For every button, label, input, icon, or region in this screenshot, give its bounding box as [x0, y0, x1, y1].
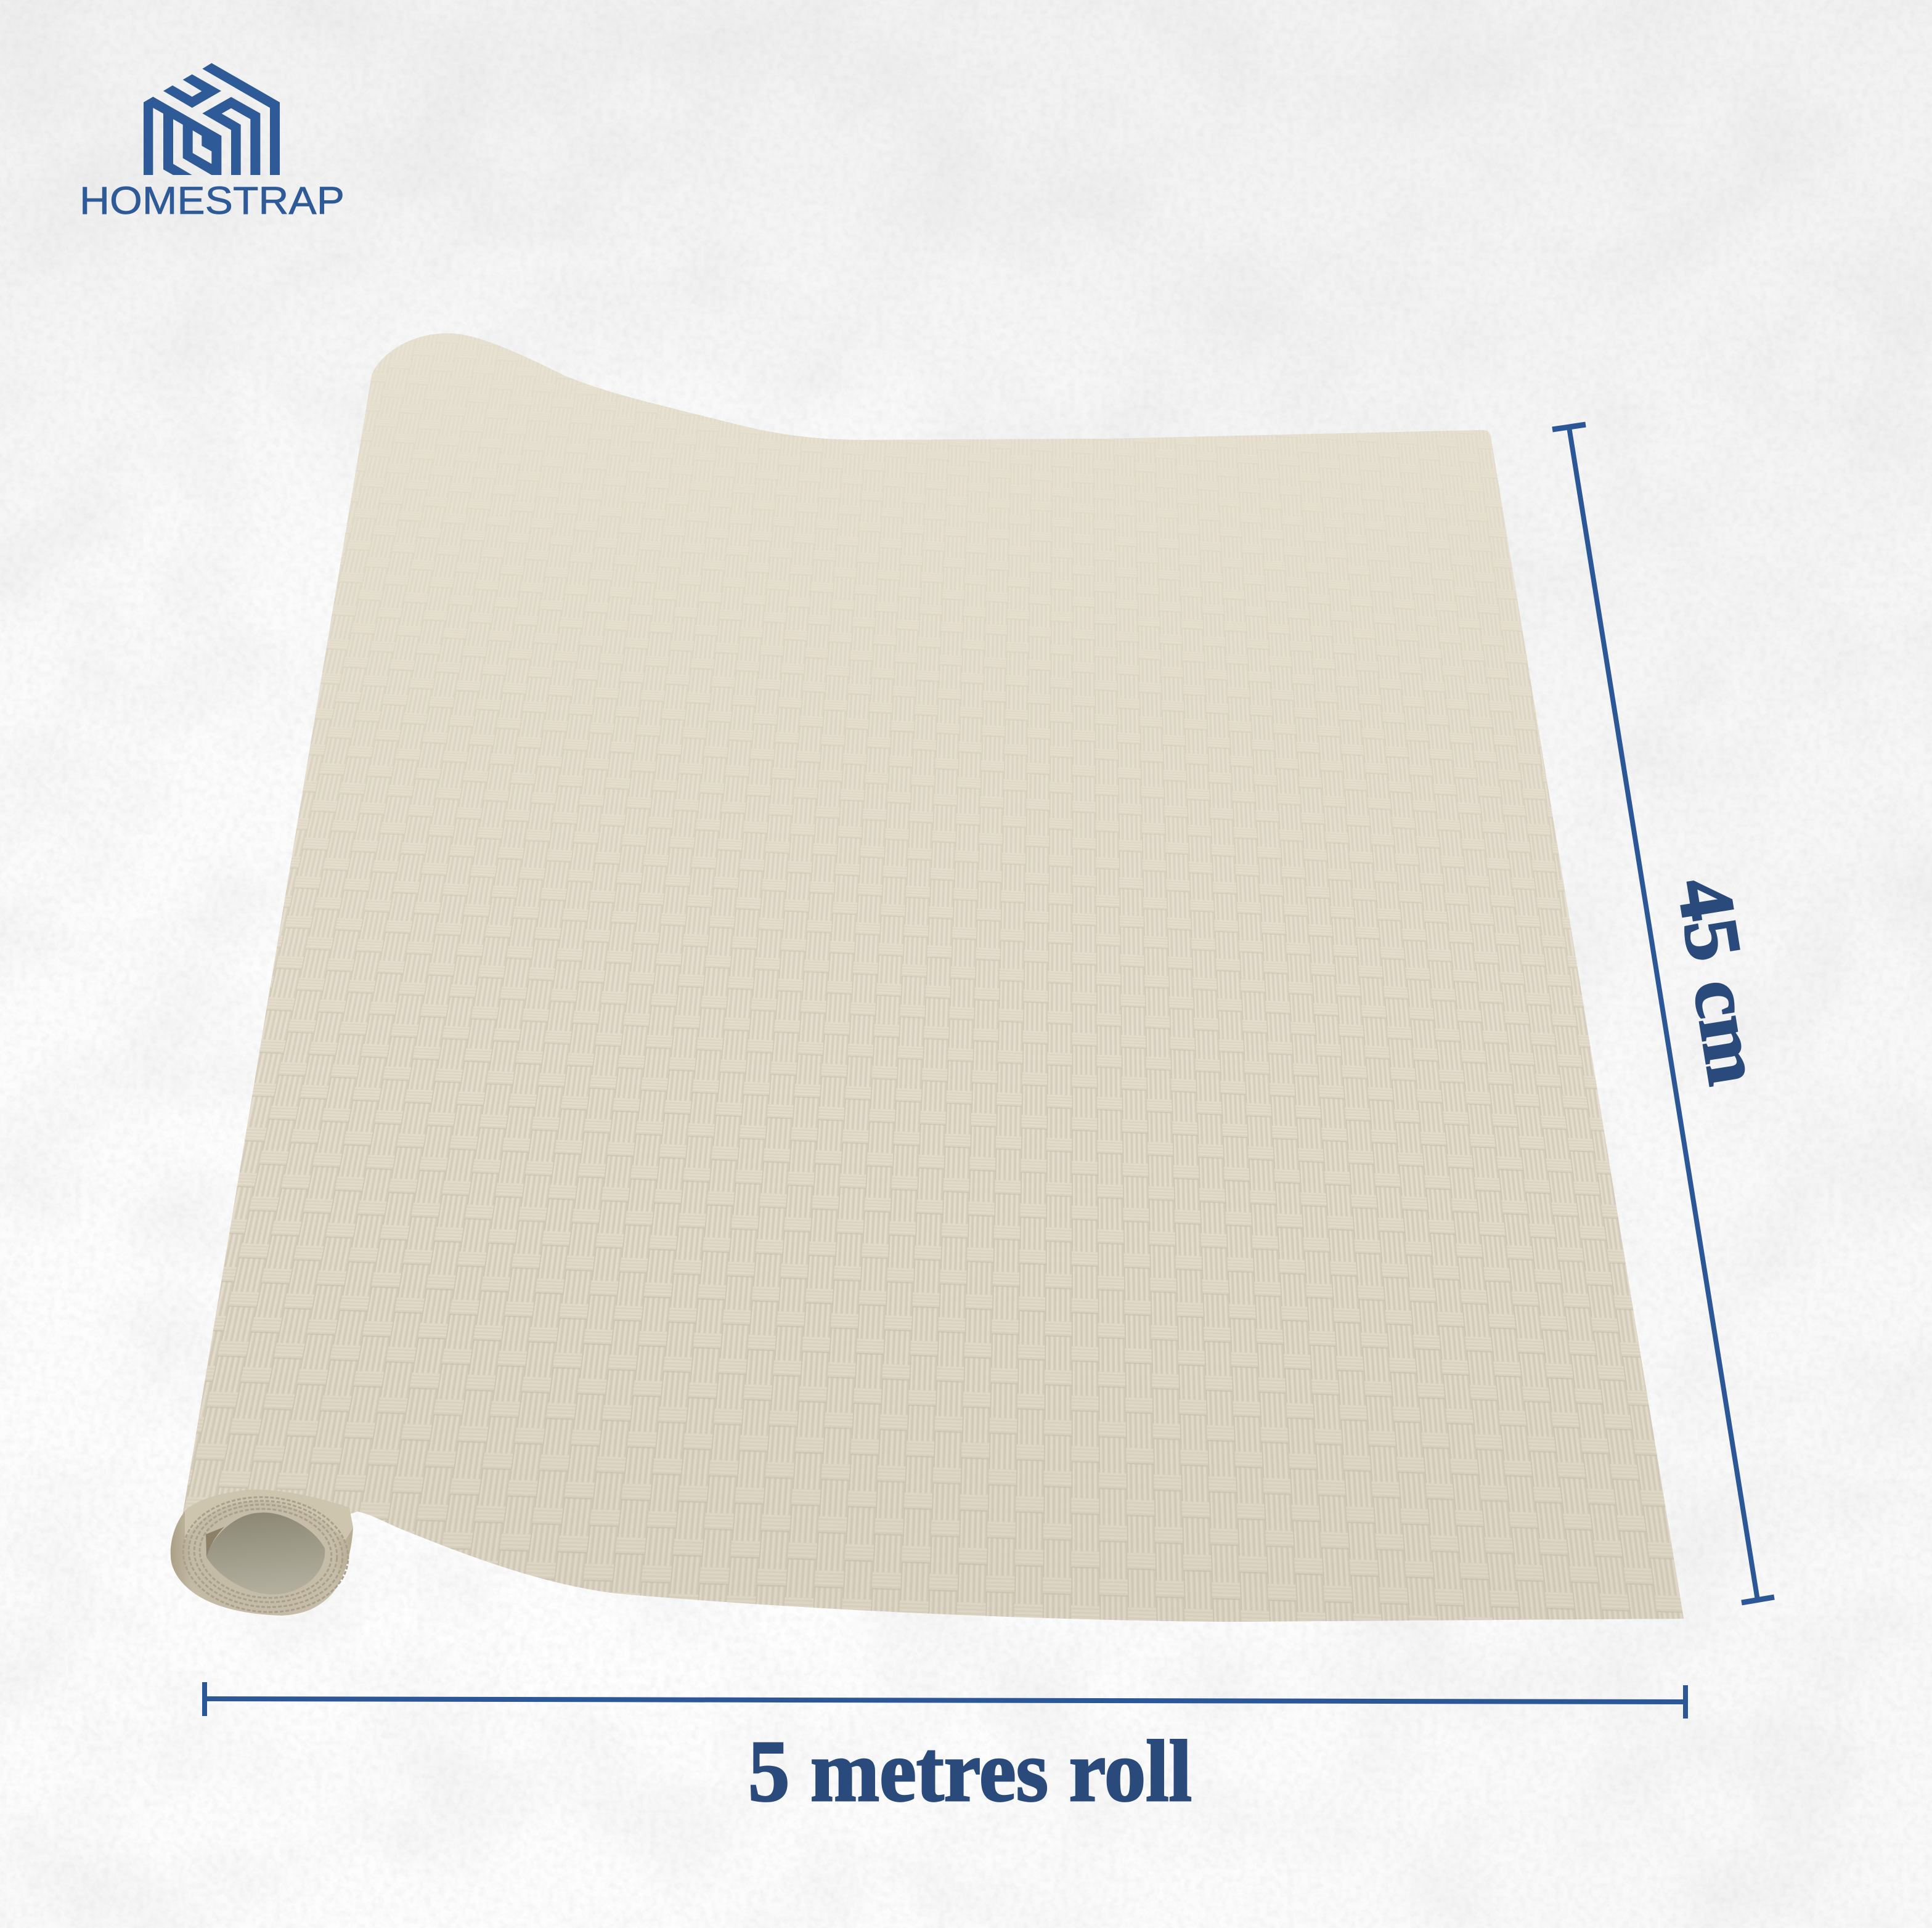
logo mark — [144, 63, 280, 175]
woven texture — [182, 333, 1684, 1622]
roll inner shadow wedge — [206, 1527, 224, 1557]
left edge shading — [166, 330, 1689, 1624]
logo wordmark: HOMESTRAP — [79, 179, 344, 222]
roll cut edge layers — [179, 1492, 352, 1617]
roll outer wrap — [171, 1490, 353, 1616]
logo: Homestrap — [79, 63, 344, 222]
roll hollow centre — [206, 1513, 325, 1595]
width label: 45 cm — [1660, 872, 1777, 1090]
roll top band — [185, 1490, 353, 1540]
product: woven shelf liner mat sheet — [166, 330, 1689, 1624]
length label: 5 metres roll — [748, 1722, 1192, 1820]
rolled end of the mat — [171, 1490, 353, 1617]
light fade toward the top of the sheet — [166, 330, 1689, 1624]
dimension line: width 45 cm — [1552, 425, 1774, 1603]
dimension line: length 5 metres — [205, 1682, 1685, 1719]
